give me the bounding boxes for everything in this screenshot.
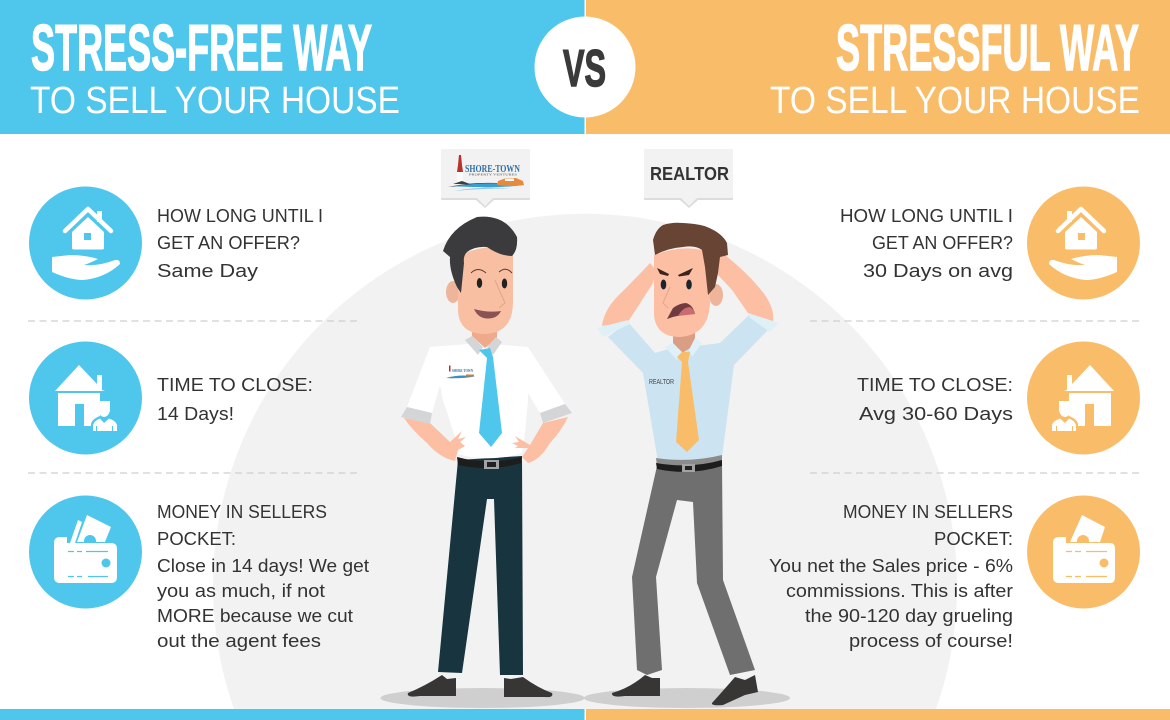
eyes xyxy=(477,278,507,288)
logo speech bubble xyxy=(441,149,530,208)
left column text 2: 14 Days! xyxy=(157,403,234,424)
left column text 3: MONEY IN SELLERS xyxy=(157,501,327,522)
logo: Shore-Town xyxy=(448,155,524,191)
ear xyxy=(709,284,723,306)
icon: orange house in hand xyxy=(1027,186,1140,300)
shirt xyxy=(407,343,565,458)
pants xyxy=(632,462,755,675)
arms xyxy=(602,255,773,326)
tie xyxy=(676,352,699,452)
icon: orange house with agent xyxy=(1027,342,1140,454)
right column text 1: 30 Days on avg xyxy=(863,260,1013,281)
ear xyxy=(446,281,460,303)
bottom bar left xyxy=(0,709,584,720)
neck xyxy=(673,330,695,353)
right column text 1 xyxy=(840,205,1013,281)
left column text 1: Same Day xyxy=(157,260,259,281)
right column text 3: You net the Sales price - 6% xyxy=(769,555,1013,576)
right column text 3: commissions. This is after xyxy=(786,580,1013,601)
logo: Shore-Town: PROPERTY VENTURES xyxy=(469,172,517,176)
left column text 3: POCKET: xyxy=(157,528,236,549)
shirt logo xyxy=(446,366,475,378)
belt xyxy=(457,457,521,469)
left column text 3: Close in 14 days! We get xyxy=(157,555,369,576)
right column text 2 xyxy=(857,374,1013,424)
icon: blue wallet with cash xyxy=(29,496,142,608)
collar xyxy=(465,336,502,355)
face xyxy=(458,245,513,334)
VS badge: VS xyxy=(563,40,606,98)
right column text 1: GET AN OFFER? xyxy=(872,232,1013,253)
character: calm seller man xyxy=(401,217,572,697)
tie xyxy=(479,348,502,447)
right header panel xyxy=(586,0,1170,134)
left column text 1: GET AN OFFER? xyxy=(157,232,300,253)
left column text 3 xyxy=(157,501,369,651)
left column text 3: you as much, if not xyxy=(157,580,325,601)
right column text 3: process of course! xyxy=(849,630,1013,651)
hair xyxy=(443,217,517,293)
icon: blue house in hand xyxy=(29,186,142,300)
left header panel xyxy=(0,0,584,134)
hair xyxy=(653,223,728,295)
icon: orange wallet with cash xyxy=(1027,496,1140,608)
shoes xyxy=(612,675,758,705)
mouth xyxy=(667,303,695,319)
logo: Shore-Town: SHORE-TOWN xyxy=(465,164,521,175)
shirt logo: SHORE-TOWN xyxy=(452,368,473,373)
neck xyxy=(472,325,497,348)
realtor speech bubble xyxy=(644,149,733,208)
right column text 3 xyxy=(769,501,1013,651)
sleeve cuffs xyxy=(597,313,779,337)
right column text 1: HOW LONG UNTIL I xyxy=(840,205,1013,226)
shirt xyxy=(608,315,768,463)
realtor speech bubble: REALTOR xyxy=(650,163,729,184)
character: stressed man xyxy=(597,223,779,705)
left column text 3: out the agent fees xyxy=(157,630,321,651)
left column text 2 xyxy=(157,374,313,424)
belt xyxy=(656,455,722,472)
pants xyxy=(438,456,523,675)
sleeve cuffs xyxy=(401,404,572,424)
floor shadows xyxy=(380,688,790,708)
brows and nose xyxy=(471,269,512,308)
background circle xyxy=(213,214,957,709)
left subtitle: TO SELL YOUR HOUSE xyxy=(30,80,400,122)
arms xyxy=(404,417,568,463)
right column text 3: POCKET: xyxy=(934,528,1013,549)
mouth xyxy=(474,309,501,319)
bottom bar right xyxy=(586,709,1170,720)
shoes xyxy=(408,675,552,697)
shirt label: REALTOR xyxy=(649,377,674,386)
VS badge xyxy=(534,16,636,118)
brows and nose xyxy=(657,268,693,308)
eyes xyxy=(661,280,692,290)
right column text 2: TIME TO CLOSE: xyxy=(857,374,1013,395)
collar xyxy=(665,338,702,360)
left column text 2: TIME TO CLOSE: xyxy=(157,374,313,395)
face xyxy=(654,248,710,337)
right column text 3: MONEY IN SELLERS xyxy=(843,501,1013,522)
right column text 3: the 90-120 day grueling xyxy=(805,605,1013,626)
left column text 3: MORE because we cut xyxy=(157,605,353,626)
left column text 1 xyxy=(157,205,323,281)
left title: STRESS-FREE WAY xyxy=(31,11,372,84)
icon: blue house with agent xyxy=(29,342,142,454)
right column text 2: Avg 30-60 Days xyxy=(859,403,1013,424)
left column text 1: HOW LONG UNTIL I xyxy=(157,205,323,226)
